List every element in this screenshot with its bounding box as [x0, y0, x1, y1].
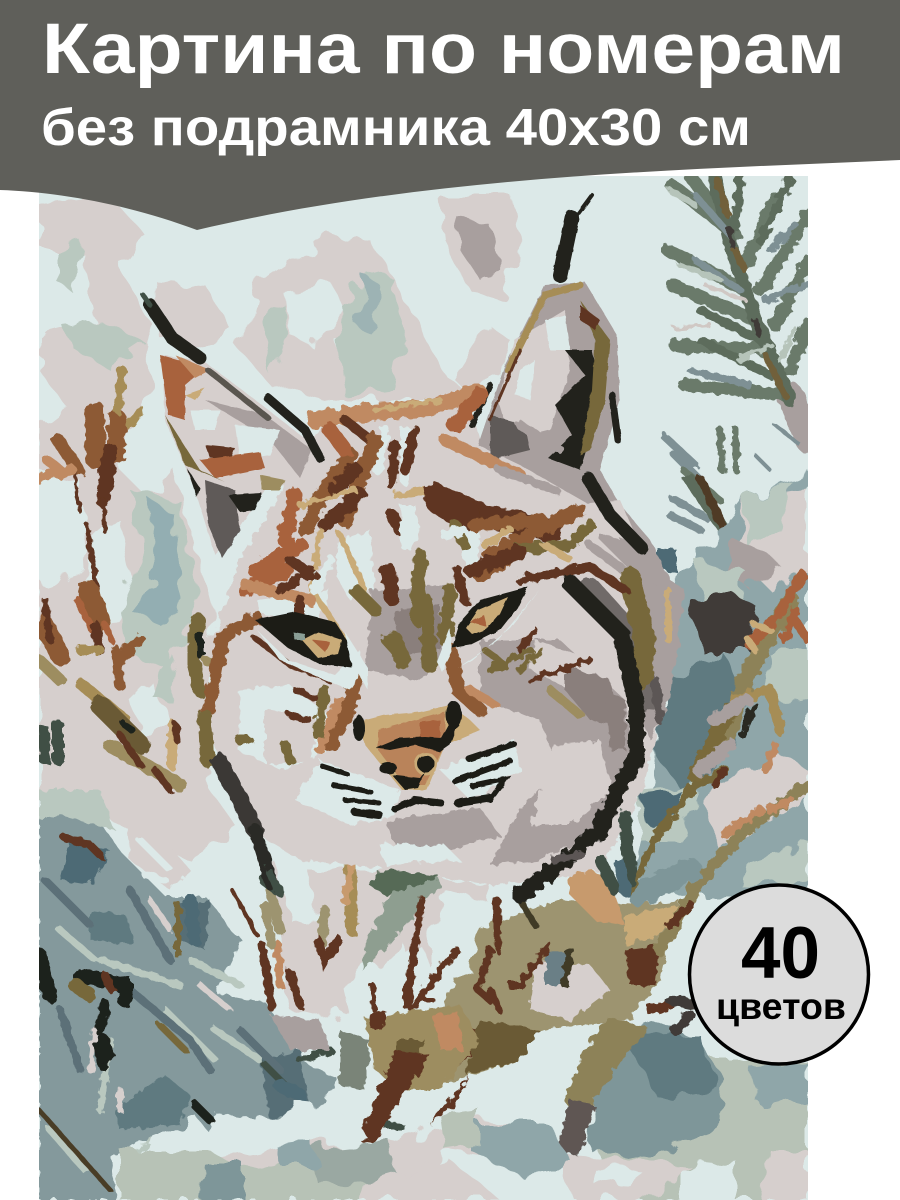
left twigs — [39, 370, 180, 790]
twig mass stems — [478, 785, 808, 1030]
left face outline — [192, 618, 278, 890]
right ear tuft and rim — [472, 195, 642, 548]
badge: 40 colours: 40 — [741, 913, 820, 994]
muzzle olive fur — [205, 630, 590, 760]
nose — [353, 701, 480, 790]
right eye — [437, 587, 540, 672]
badge: 40 colours — [690, 885, 868, 1064]
head base fur — [212, 400, 685, 885]
right ear — [478, 282, 634, 539]
subtitle: без подрамника 40х30 см — [41, 99, 751, 157]
mid right pine branch — [665, 425, 800, 548]
forehead markings — [245, 392, 630, 660]
pine needles lower left — [39, 838, 330, 1190]
whiskers and mouth — [322, 744, 514, 815]
left ear tuft and dark rim — [143, 295, 320, 458]
centre twigs and olive column — [230, 864, 462, 1012]
lower left pine foliage — [39, 790, 339, 1200]
right face outline — [520, 567, 668, 895]
dark slate patch near neck — [657, 548, 677, 572]
title: Картина по номерам — [42, 10, 845, 89]
left ear — [160, 355, 322, 558]
left eye — [255, 612, 368, 690]
top right pine branch — [668, 176, 808, 440]
sage triangle under chin — [362, 868, 442, 970]
bottom left twig mass — [270, 1005, 480, 1145]
right side blue-grey foliage — [630, 470, 808, 900]
badge: 40 colours: цветов — [716, 986, 846, 1027]
background: white holes in snow — [86, 279, 343, 736]
header banner — [0, 0, 900, 230]
background: sage and blue washes — [55, 215, 505, 700]
background: pale mauve snow patches — [39, 195, 520, 860]
lynx head — [143, 195, 685, 895]
lower right foliage — [560, 1020, 808, 1200]
centre lower snow and sage — [272, 860, 492, 1022]
painting: lynx in snowy pines — [39, 176, 808, 1200]
bottom snow bank — [120, 1105, 575, 1200]
right diagonal branches — [630, 575, 808, 890]
lower right twig mass — [440, 857, 680, 1157]
